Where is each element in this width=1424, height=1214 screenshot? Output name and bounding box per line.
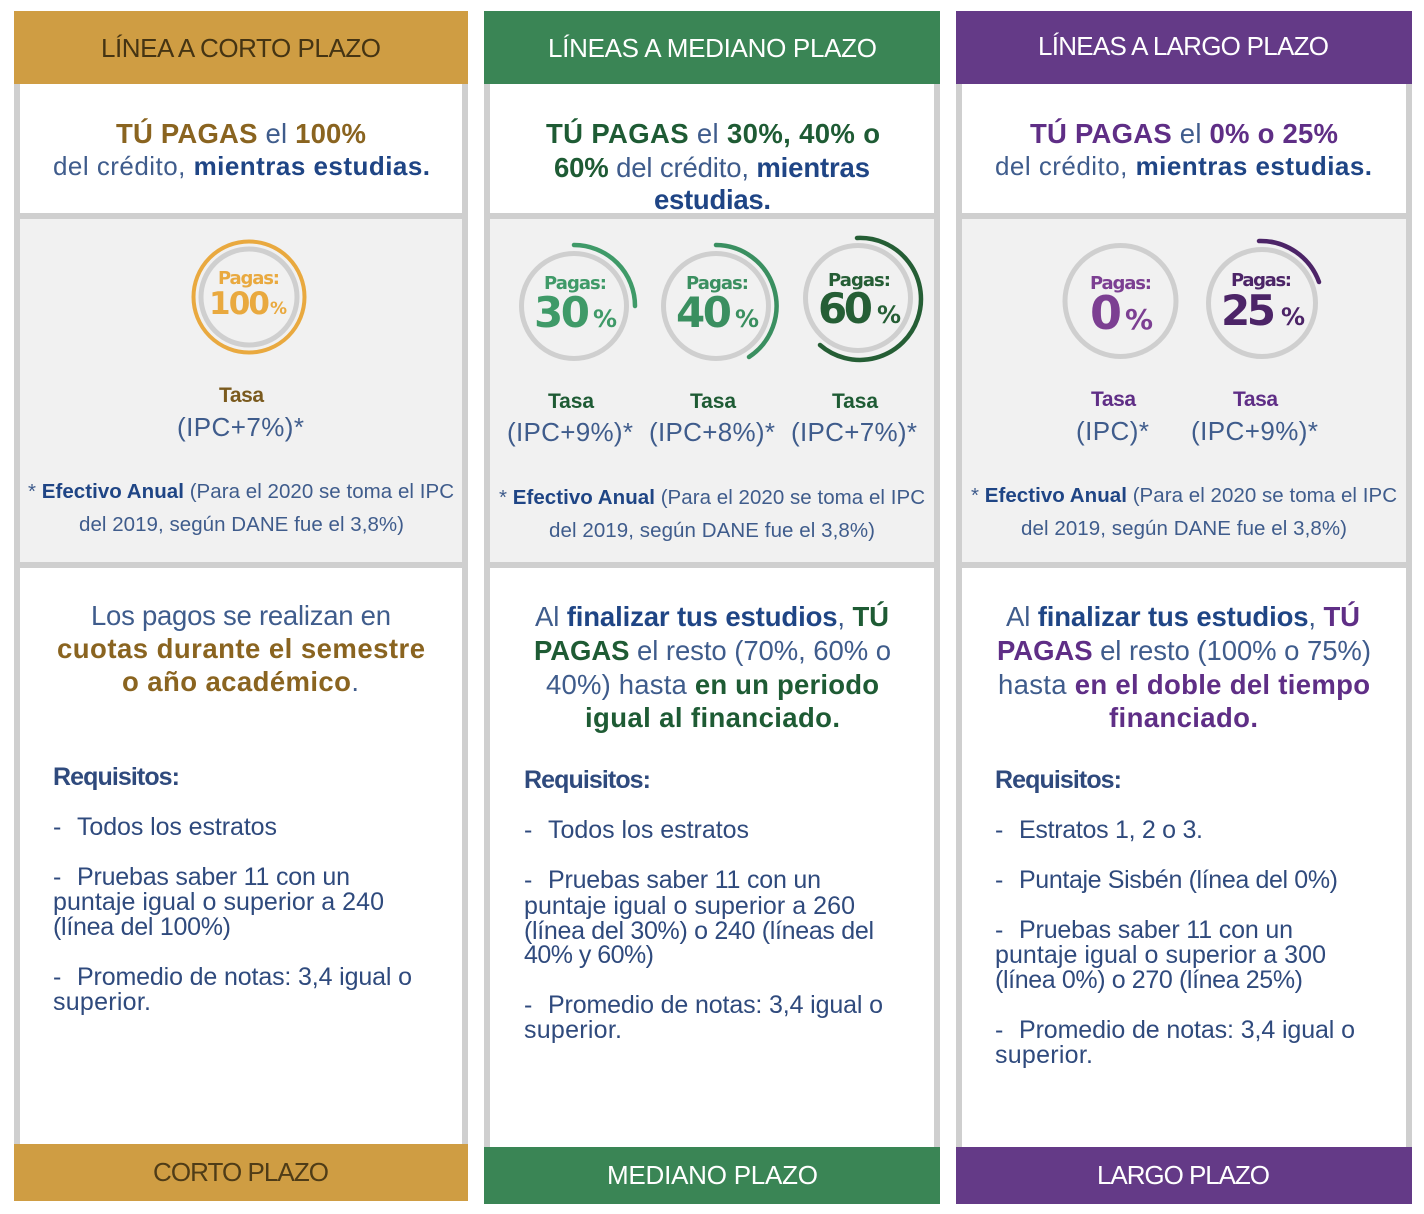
text: forma de pago: financiado. (1109, 702, 1258, 733)
text: requisitos: (línea del 100%) (53, 913, 231, 941)
text: requisitos: - (995, 866, 1003, 894)
icon: gauge pagas 30%: Pagas: (544, 273, 607, 294)
text: tasas largo plazo: (IPC+9%)* (1191, 416, 1318, 446)
text: requisitos: - (524, 991, 532, 1019)
text: requisitos: puntaje igual o superior a 240 (53, 888, 384, 916)
text: requisitos: Promedio de notas: 3,4 igual o (77, 963, 412, 991)
icon: gauge pagas 100% (194, 242, 304, 352)
text: tasas largo plazo: (IPC)* (1076, 416, 1149, 446)
icon: gauge pagas 0%: 0 (1090, 286, 1122, 340)
text: tasas mediano plazo: (IPC+9%)* (507, 417, 633, 447)
footer: corto plazo (14, 1144, 468, 1201)
text: nota efectivo anual (971, 484, 1397, 540)
text: tú pagas 30, 40 o 60%: 60% del crédito, mientras (554, 152, 870, 183)
text: tú pagas 0 o 25%: TÚ PAGAS el 0% o 25% (1030, 118, 1338, 149)
icon: gauge pagas 40%: 40 (676, 288, 732, 337)
text: tasa ipc+7%: Tasa (219, 384, 264, 407)
text: forma de pago: cuotas durante el semestre (57, 633, 425, 664)
icon: gauge pagas 40%: % (735, 305, 759, 333)
icon: gauge pagas 100%: % (270, 299, 287, 319)
heading: línea a corto plazo: LÍNEA A CORTO PLAZO (101, 33, 381, 63)
text: forma de pago: o año académico. (122, 666, 359, 697)
text: requisitos: Promedio de notas: 3,4 igual o (548, 991, 883, 1019)
text: requisitos: (línea 0%) o 270 (línea 25%) (995, 966, 1303, 994)
icon: gauge pagas 25%: Pagas: (1231, 270, 1292, 291)
heading: líneas a mediano plazo: LÍNEAS A MEDIANO PLAZO (548, 33, 877, 63)
text: tasas largo plazo: Tasa (1233, 388, 1278, 411)
text: tasas mediano plazo: Tasa (548, 390, 594, 413)
icon: gauge pagas 0% (1065, 246, 1176, 356)
text: requisitos: superior. (53, 988, 151, 1016)
text: requisitos (995, 766, 1355, 1069)
text: requisitos: Requisitos: (524, 766, 651, 794)
text: tasa ipc+7% (177, 384, 304, 442)
text: forma de pago (57, 600, 425, 697)
icon: gauge pagas 30%: % (593, 305, 617, 333)
text: tú pagas 30, 40 o 60% (546, 118, 880, 215)
heading: líneas a largo plazo (956, 11, 1412, 84)
text: requisitos: Puntaje Sisbén (línea del 0%) (1019, 866, 1338, 894)
heading: línea a corto plazo (14, 11, 468, 84)
text: forma de pago (997, 601, 1371, 733)
icon: gauge pagas 40%: Pagas: (686, 273, 749, 294)
icon: gauge pagas 40% (664, 245, 777, 358)
icon: gauge pagas 30%: 30 (534, 288, 590, 337)
icon: gauge pagas 25% (1208, 241, 1319, 356)
text: forma de pago: PAGAS el resto (70%, 60% o (534, 635, 891, 666)
text: tasas largo plazo (1076, 388, 1318, 446)
text: tú pagas 0 o 25% (995, 118, 1372, 181)
text: forma de pago: PAGAS el resto (100% o 75%) (997, 635, 1371, 666)
text: requisitos: Requisitos: (995, 766, 1122, 794)
text: nota efectivo anual (28, 480, 454, 536)
icon: gauge pagas 100%: 100 (209, 286, 270, 322)
icon: gauge pagas 60% (806, 238, 921, 360)
text: requisitos: Requisitos: (53, 763, 180, 791)
footer: largo plazo (956, 1147, 1412, 1204)
icon: gauge pagas 60%: % (877, 301, 901, 329)
text: forma de pago: Al finalizar tus estudios, TÚ (535, 601, 889, 632)
text: requisitos: Pruebas saber 11 con un (548, 866, 821, 894)
text: tasas mediano plazo: Tasa (832, 390, 878, 413)
text: requisitos: - (53, 863, 61, 891)
text: requisitos: - (53, 963, 61, 991)
text: nota efectivo anual: del 2019, según DANE fue el 3,8%) (1021, 517, 1347, 540)
text: requisitos: - (524, 816, 532, 844)
text: requisitos: - (995, 1016, 1003, 1044)
text: nota efectivo anual: * Efectivo Anual (Para el 2020 se toma el IPC (971, 484, 1397, 507)
text: forma de pago (534, 601, 891, 733)
text: tú pagas 0 o 25%: del crédito, mientras estudias. (995, 151, 1372, 181)
panel: mediano plazo (484, 11, 940, 1204)
icon: gauge pagas 25%: 25 (1221, 286, 1276, 335)
text: nota efectivo anual (499, 486, 925, 542)
text: requisitos: - (53, 813, 61, 841)
text: forma de pago: 40%) hasta en un periodo (546, 669, 879, 700)
text: requisitos: superior. (524, 1016, 622, 1044)
icon: gauge pagas 0%: % (1125, 303, 1153, 336)
text: tasas mediano plazo: (IPC+7%)* (791, 417, 917, 447)
footer: largo plazo: LARGO PLAZO (1097, 1160, 1270, 1190)
text: forma de pago: hasta en el doble del tiempo (998, 669, 1370, 700)
panel: largo plazo (956, 11, 1412, 1204)
panel: corto plazo (14, 11, 468, 1201)
heading: líneas a largo plazo: LÍNEAS A LARGO PLAZO (1038, 31, 1329, 61)
text: requisitos: Pruebas saber 11 con un (77, 863, 350, 891)
text: nota efectivo anual: del 2019, según DANE fue el 3,8%) (549, 519, 875, 542)
text: forma de pago: igual al financiado. (585, 702, 840, 733)
icon: gauge pagas 100%: Pagas: (218, 268, 280, 289)
icon: gauge pagas 25%: % (1281, 303, 1305, 331)
text: requisitos: puntaje igual o superior a 300 (995, 941, 1326, 969)
text: tú pagas 100%: TÚ PAGAS el 100% (116, 118, 366, 149)
icon: gauge pagas 30% (522, 245, 635, 358)
text: requisitos (524, 766, 883, 1044)
text: tasas mediano plazo: (IPC+8%)* (649, 417, 775, 447)
text: requisitos: puntaje igual o superior a 260 (524, 892, 855, 920)
text: nota efectivo anual: * Efectivo Anual (Para el 2020 se toma el IPC (499, 486, 925, 509)
text: requisitos: - (995, 816, 1003, 844)
icon: gauge pagas 60%: 60 (818, 284, 873, 333)
text: tasa ipc+7%: (IPC+7%)* (177, 412, 304, 442)
text: nota efectivo anual: * Efectivo Anual (Para el 2020 se toma el IPC (28, 480, 454, 503)
text: forma de pago: Los pagos se realizan en (91, 600, 391, 631)
text: requisitos: Todos los estratos (548, 816, 749, 844)
footer: mediano plazo: MEDIANO PLAZO (607, 1160, 818, 1190)
icon: gauge pagas 0%: Pagas: (1090, 273, 1152, 294)
text: requisitos: Promedio de notas: 3,4 igual o (1019, 1016, 1355, 1044)
footer: mediano plazo (484, 1147, 940, 1204)
text: tú pagas 100%: del crédito, mientras estudias. (53, 151, 430, 181)
text: requisitos: (línea del 30%) o 240 (líneas del (524, 917, 874, 945)
text: tú pagas 30, 40 o 60%: estudias. (654, 184, 771, 215)
icon: gauge pagas 60%: Pagas: (828, 270, 891, 291)
text: requisitos: - (995, 916, 1003, 944)
text: requisitos (53, 763, 412, 1016)
text: tasas mediano plazo: Tasa (690, 390, 736, 413)
text: tasas largo plazo: Tasa (1091, 388, 1136, 411)
footer: corto plazo: CORTO PLAZO (153, 1157, 329, 1187)
text: tú pagas 100% (53, 118, 430, 181)
text: requisitos: 40% y 60%) (524, 941, 654, 969)
text: requisitos: Estratos 1, 2 o 3. (1019, 816, 1203, 844)
text: requisitos: Pruebas saber 11 con un (1019, 916, 1293, 944)
text: requisitos: Todos los estratos (77, 813, 277, 841)
text: forma de pago: Al finalizar tus estudios, TÚ (1006, 601, 1360, 632)
text: requisitos: superior. (995, 1041, 1093, 1069)
text: tú pagas 30, 40 o 60%: TÚ PAGAS el 30%, 40% o (546, 118, 880, 149)
text: tasas mediano plazo (507, 390, 917, 447)
heading: líneas a mediano plazo (484, 11, 940, 84)
text: requisitos: - (524, 866, 532, 894)
text: nota efectivo anual: del 2019, según DANE fue el 3,8%) (79, 513, 404, 536)
